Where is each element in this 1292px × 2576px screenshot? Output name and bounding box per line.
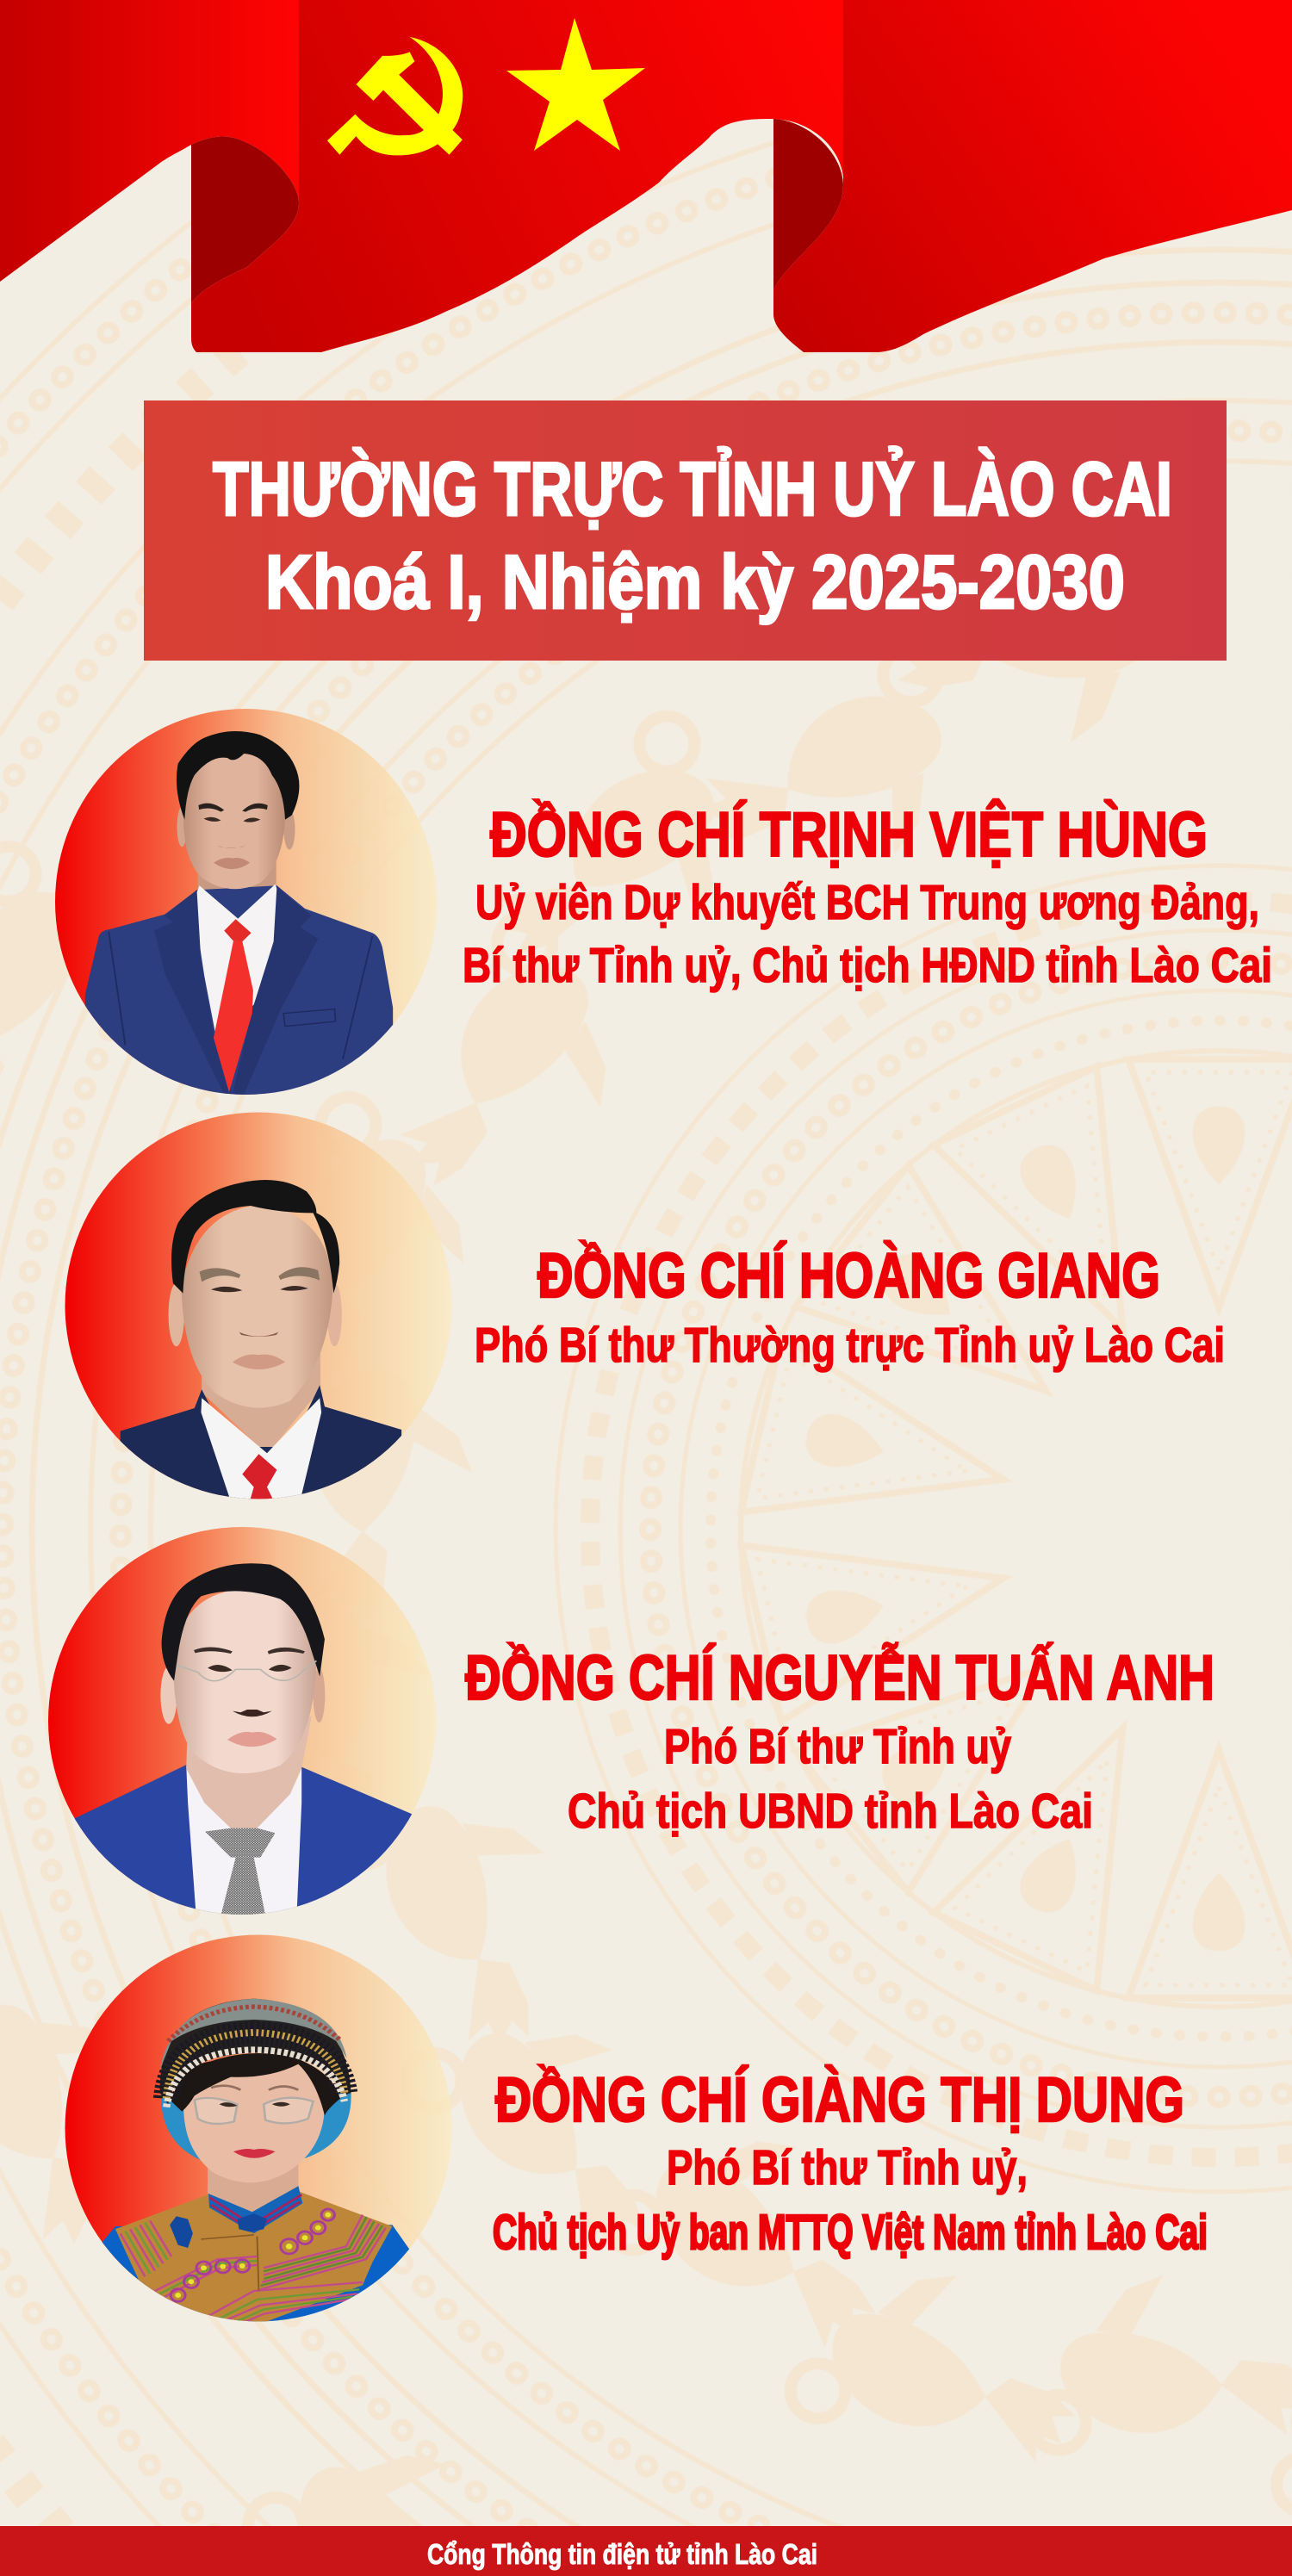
icon: hammer and sickle (327, 37, 463, 155)
text: Giàng Thị Dung (493, 2065, 1208, 2260)
footer (0, 2526, 1292, 2576)
portrait: Nguyễn Tuấn Anh (48, 1527, 436, 1923)
title background (144, 400, 1227, 661)
flag banner (0, 0, 1292, 352)
text: Nguyễn Tuấn Anh (465, 1643, 1214, 1839)
role line 2: Chủ tịch UBND tỉnh Lào Cai (568, 1784, 1093, 1839)
role line 1: Phó Bí thư Tỉnh uỷ, (667, 2140, 1028, 2195)
flag: middle band (191, 0, 843, 352)
text: Trịnh Việt Hùng (463, 800, 1272, 993)
flag: left band (0, 0, 299, 282)
portrait: Trịnh Việt Hùng (55, 709, 437, 1100)
title line 2: Khoá I, Nhiệm kỳ 2025-2030 (265, 539, 1125, 624)
portrait: Hoàng Giang (65, 1113, 451, 1510)
flag: right fold (773, 119, 843, 290)
portrait: Giàng Thị Dung (65, 1934, 451, 2328)
footer source text: Cổng Thông tin điện tử tỉnh Lào Cai (427, 2538, 817, 2570)
title panel (144, 400, 1227, 661)
text: Hoàng Giang (475, 1241, 1225, 1373)
role line 1: Phó Bí thư Tỉnh uỷ (664, 1719, 1011, 1774)
flag: left fold (191, 137, 299, 303)
flag: right band (773, 0, 1292, 352)
icon: yellow star (506, 18, 645, 151)
